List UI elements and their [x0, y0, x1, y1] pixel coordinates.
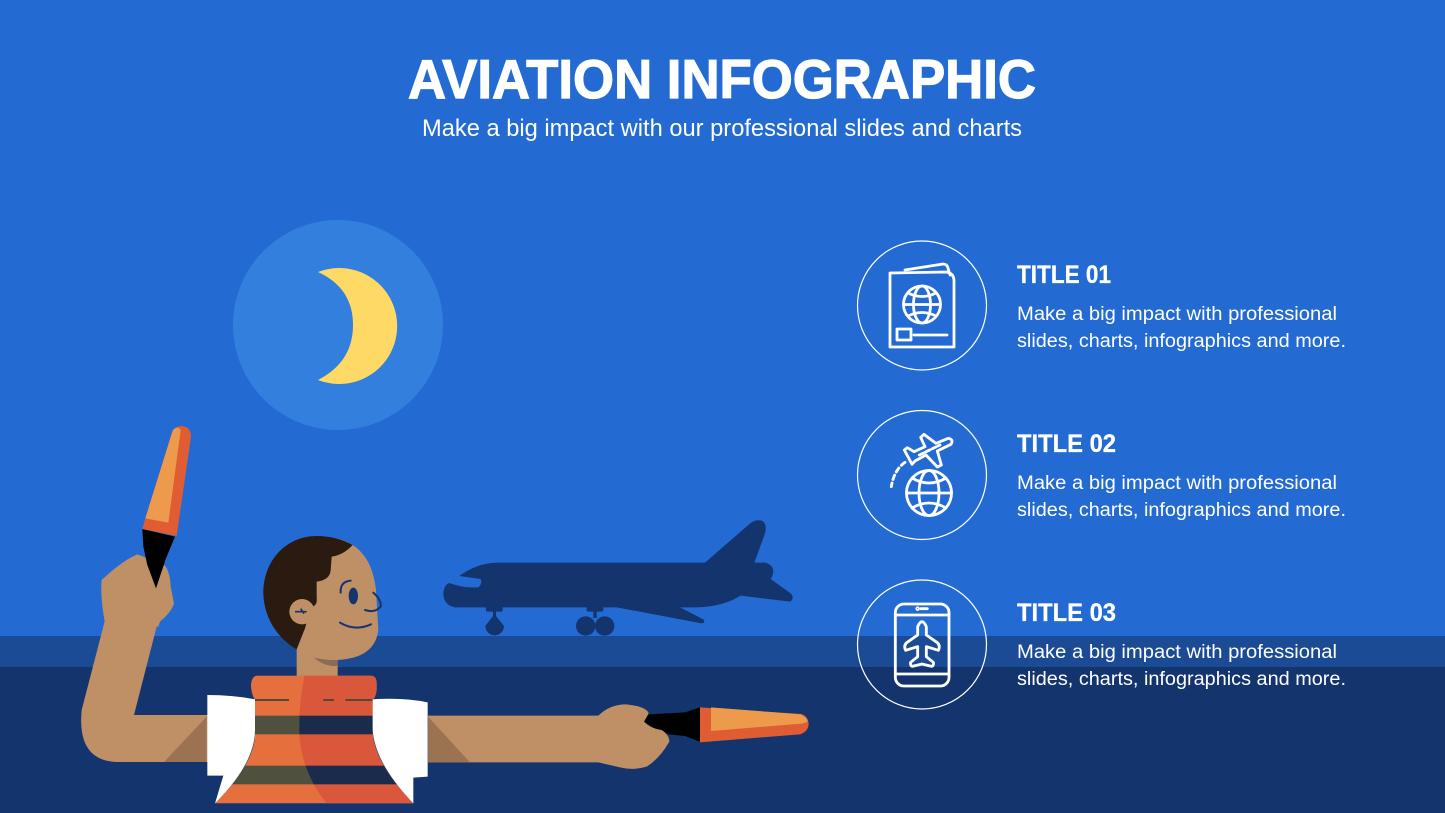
extended arm, hand and wand — [428, 704, 809, 769]
marshaller figure — [81, 426, 809, 805]
heading 02: TITLE 02 — [1017, 430, 1116, 458]
runway band — [0, 636, 1445, 667]
description 01: Make a big impact with professional — [1017, 304, 1337, 325]
heading 01: TITLE 01 — [1017, 261, 1111, 289]
raised wand — [142, 426, 191, 588]
icon: passport — [858, 241, 986, 370]
icon: plane over globe — [858, 410, 986, 540]
sky background — [0, 0, 1445, 636]
icon: phone with plane — [858, 580, 986, 709]
description 03: Make a big impact with professional — [1017, 642, 1337, 663]
description 01 — [1017, 304, 1346, 352]
subtitle: Make a big impact with our professional slides and charts — [422, 115, 1022, 142]
life vest — [207, 673, 428, 805]
item 03 — [858, 580, 1346, 709]
description 01: slides, charts, infographics and more. — [1017, 331, 1346, 352]
neck — [297, 640, 338, 678]
description 03 — [1017, 642, 1346, 690]
description 03: slides, charts, infographics and more. — [1017, 669, 1346, 690]
description 02: slides, charts, infographics and more. — [1017, 500, 1346, 521]
title: AVIATION INFOGRAPHIC — [408, 48, 1036, 110]
heading 03: TITLE 03 — [1017, 599, 1116, 627]
moon — [233, 220, 443, 430]
head — [263, 536, 381, 660]
ground — [0, 667, 1445, 813]
item 02 — [858, 410, 1346, 540]
airplane silhouette — [443, 520, 793, 636]
description 02: Make a big impact with professional — [1017, 473, 1337, 494]
item 01 — [858, 241, 1346, 370]
raised arm and hand — [81, 554, 208, 762]
description 02 — [1017, 473, 1346, 521]
